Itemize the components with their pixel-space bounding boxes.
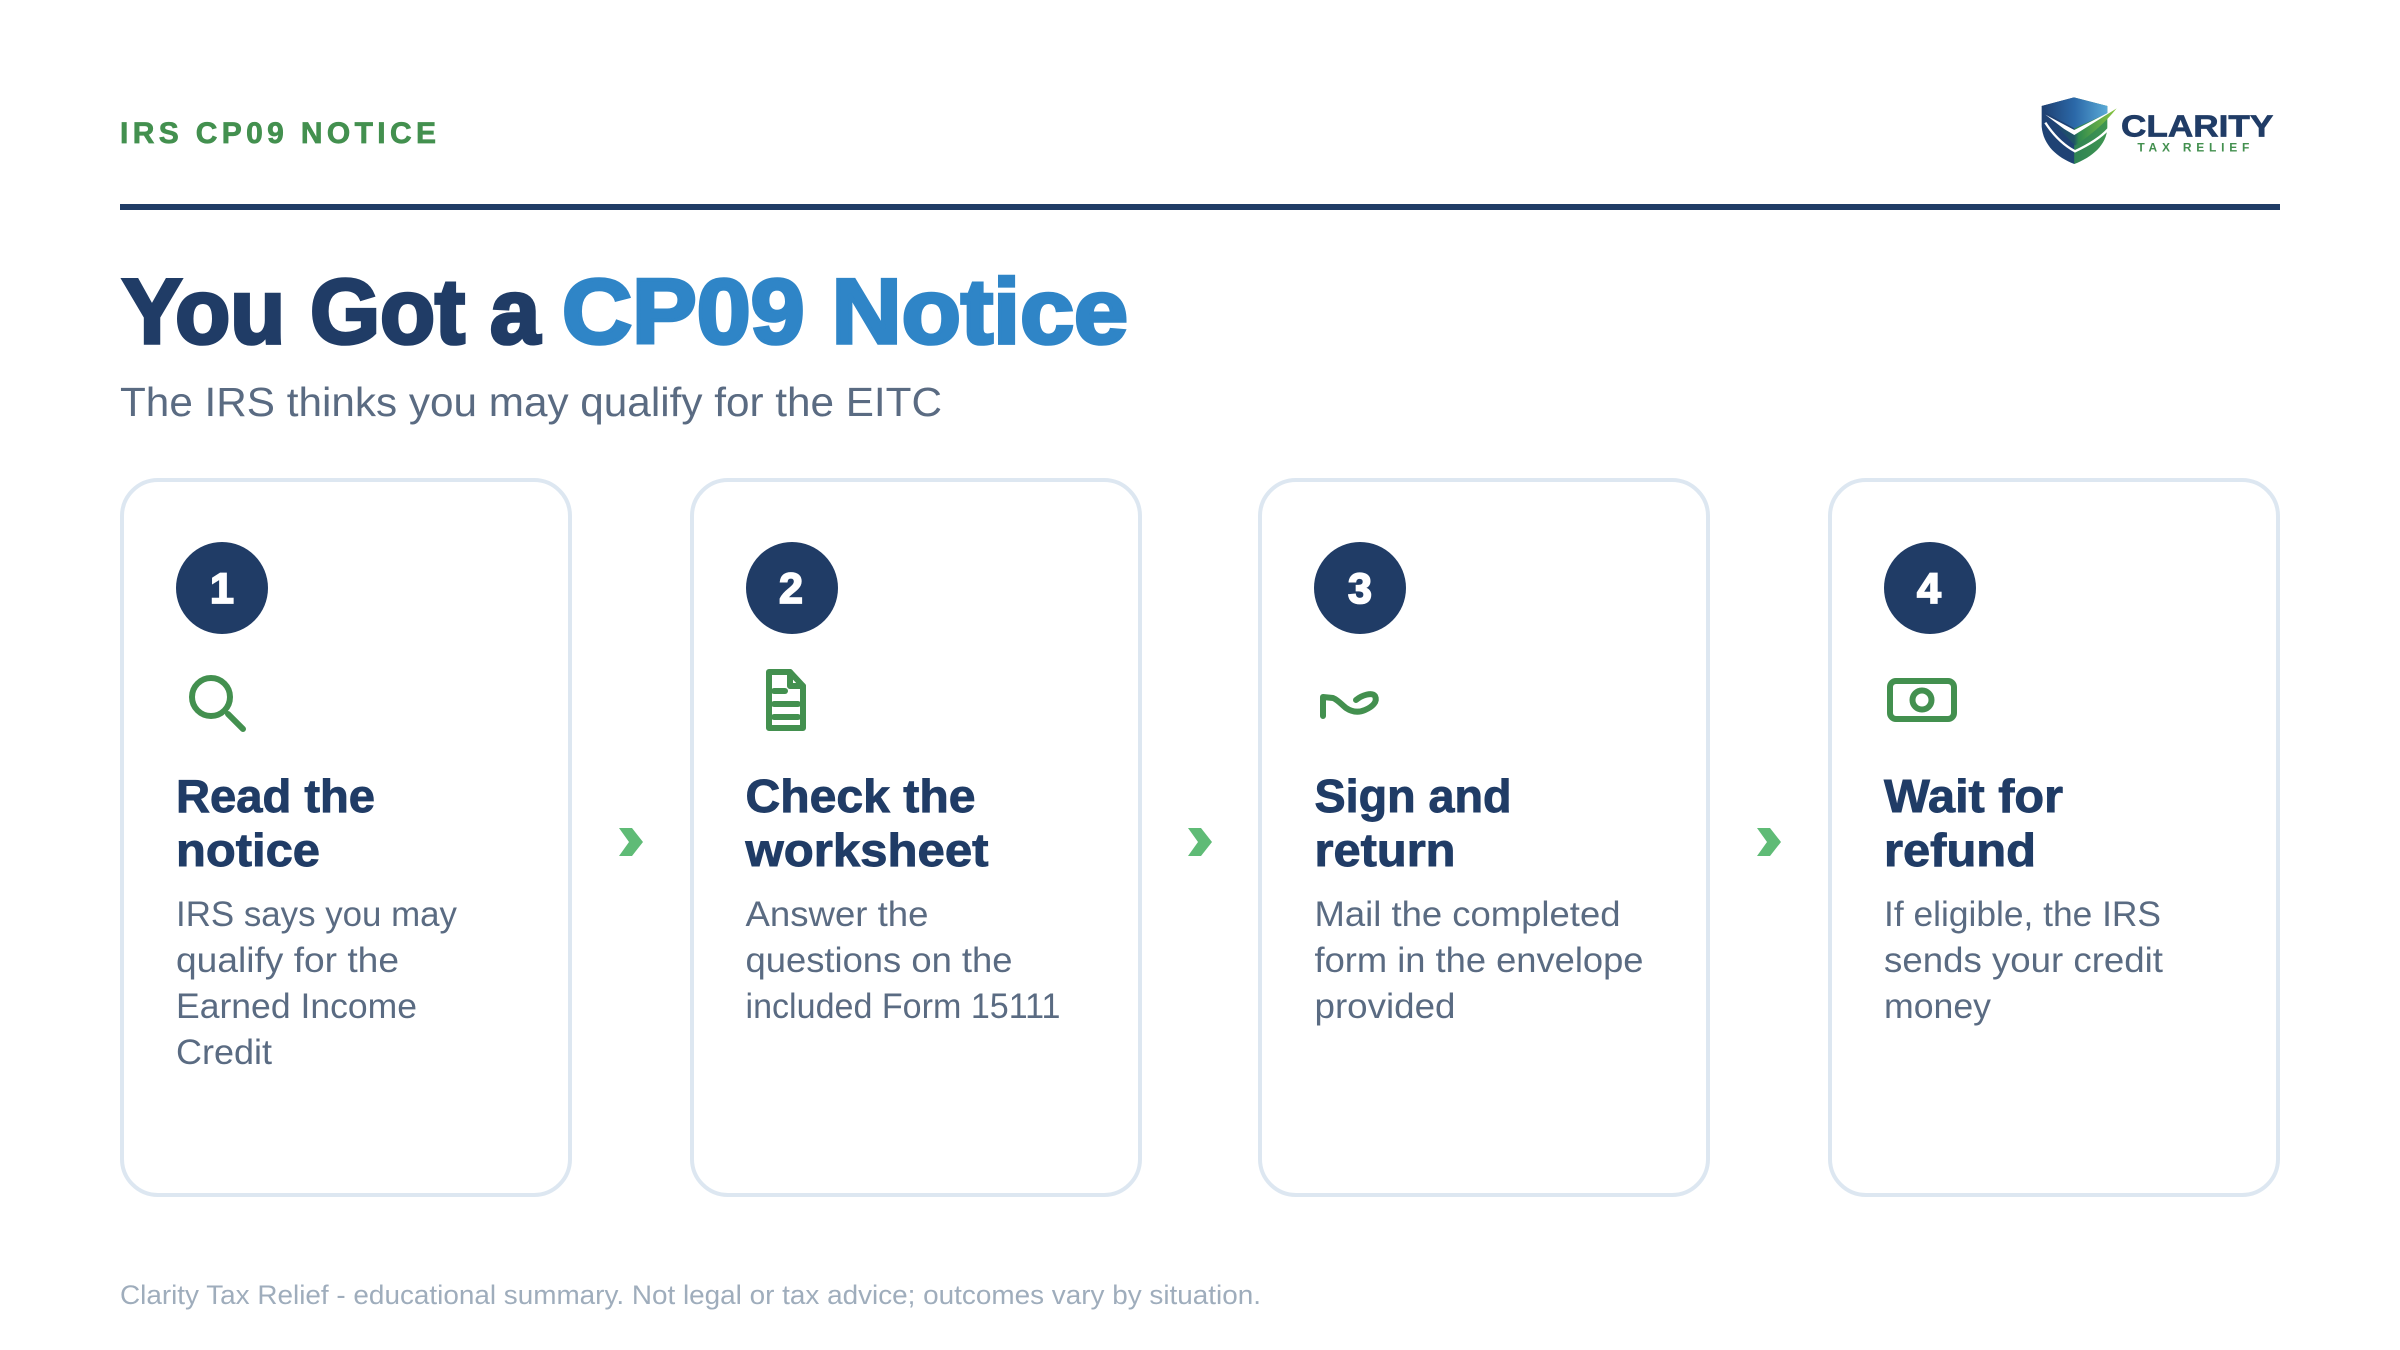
panel: step 4: [1830, 480, 2278, 1195]
arrow: step 1 to 2: [619, 828, 643, 856]
eyebrow label: IRS CP09 NOTICE: [120, 117, 436, 150]
step 1 number badge: 1: [210, 565, 234, 613]
step 2 heading: Check the: [746, 770, 976, 822]
logo shield: [2042, 97, 2117, 164]
step 1 number badge: [176, 542, 268, 634]
step 1 description: Credit: [176, 1033, 272, 1072]
step 1 heading: [176, 770, 375, 876]
step 1 description: IRS says you may: [176, 895, 457, 934]
step 2 number badge: [746, 542, 838, 634]
step 3 heading: return: [1314, 824, 1456, 876]
step 2 description: [746, 895, 1060, 1026]
footer disclaimer: Clarity Tax Relief - educational summary. Not legal or tax advice; outcomes vary by situation.: [120, 1280, 1261, 1310]
step 1 description: qualify for the: [176, 941, 399, 980]
step 4 heading: Wait for: [1884, 770, 2063, 822]
step 3 description: form in the envelope: [1314, 941, 1644, 980]
title: [122, 261, 1128, 363]
icon: signature: [1323, 694, 1376, 716]
panel: step 1: [122, 480, 570, 1195]
title: You Got a: [122, 261, 541, 363]
panel: step 2: [692, 480, 1140, 1195]
step 1 description: Earned Income: [176, 987, 417, 1026]
step 4 description: money: [1884, 987, 1991, 1026]
arrow: step 2 to 3: [1188, 828, 1212, 856]
step 4 description: [1884, 895, 2163, 1026]
step 2 description: included Form 15111: [746, 987, 1060, 1026]
step 1 description: [176, 895, 457, 1072]
step 1 heading: Read the: [176, 770, 375, 822]
step 4 description: If eligible, the IRS: [1884, 895, 2161, 934]
step 2 heading: worksheet: [744, 824, 988, 876]
step 1 heading: notice: [176, 824, 320, 876]
step 4 number badge: [1884, 542, 1976, 634]
step 4 heading: refund: [1884, 824, 2036, 876]
step 4 number badge: 4: [1917, 565, 1941, 613]
step 3 number badge: [1314, 542, 1406, 634]
header rule: [120, 204, 2280, 210]
step 3 heading: Sign and: [1314, 770, 1512, 822]
step 2 number badge: 2: [779, 565, 803, 613]
subtitle: The IRS thinks you may qualify for the EITC: [120, 379, 942, 425]
step 2 description: Answer the: [746, 895, 928, 934]
step 4 description: sends your credit: [1884, 941, 2163, 980]
step 4 heading: [1884, 770, 2063, 876]
icon: document: [769, 672, 803, 728]
step 2 heading: [744, 770, 988, 876]
logo tagline: TAX RELIEF: [2137, 141, 2249, 155]
panel: step 3: [1260, 480, 1708, 1195]
logo wordmark: CLARITY: [2121, 110, 2273, 144]
step 3 heading: [1314, 770, 1512, 876]
step 3 number badge: 3: [1348, 565, 1372, 613]
title: CP09 Notice: [562, 261, 1128, 363]
step 2 description: questions on the: [746, 941, 1012, 980]
step 3 description: Mail the completed: [1314, 895, 1620, 934]
icon: banknote: [1890, 681, 1954, 719]
logo: Clarity Tax Relief: [2042, 97, 2273, 164]
step 3 description: provided: [1314, 987, 1456, 1026]
step 3 description: [1314, 895, 1644, 1026]
icon: magnifying glass: [192, 678, 243, 729]
arrow: step 3 to 4: [1757, 828, 1781, 856]
